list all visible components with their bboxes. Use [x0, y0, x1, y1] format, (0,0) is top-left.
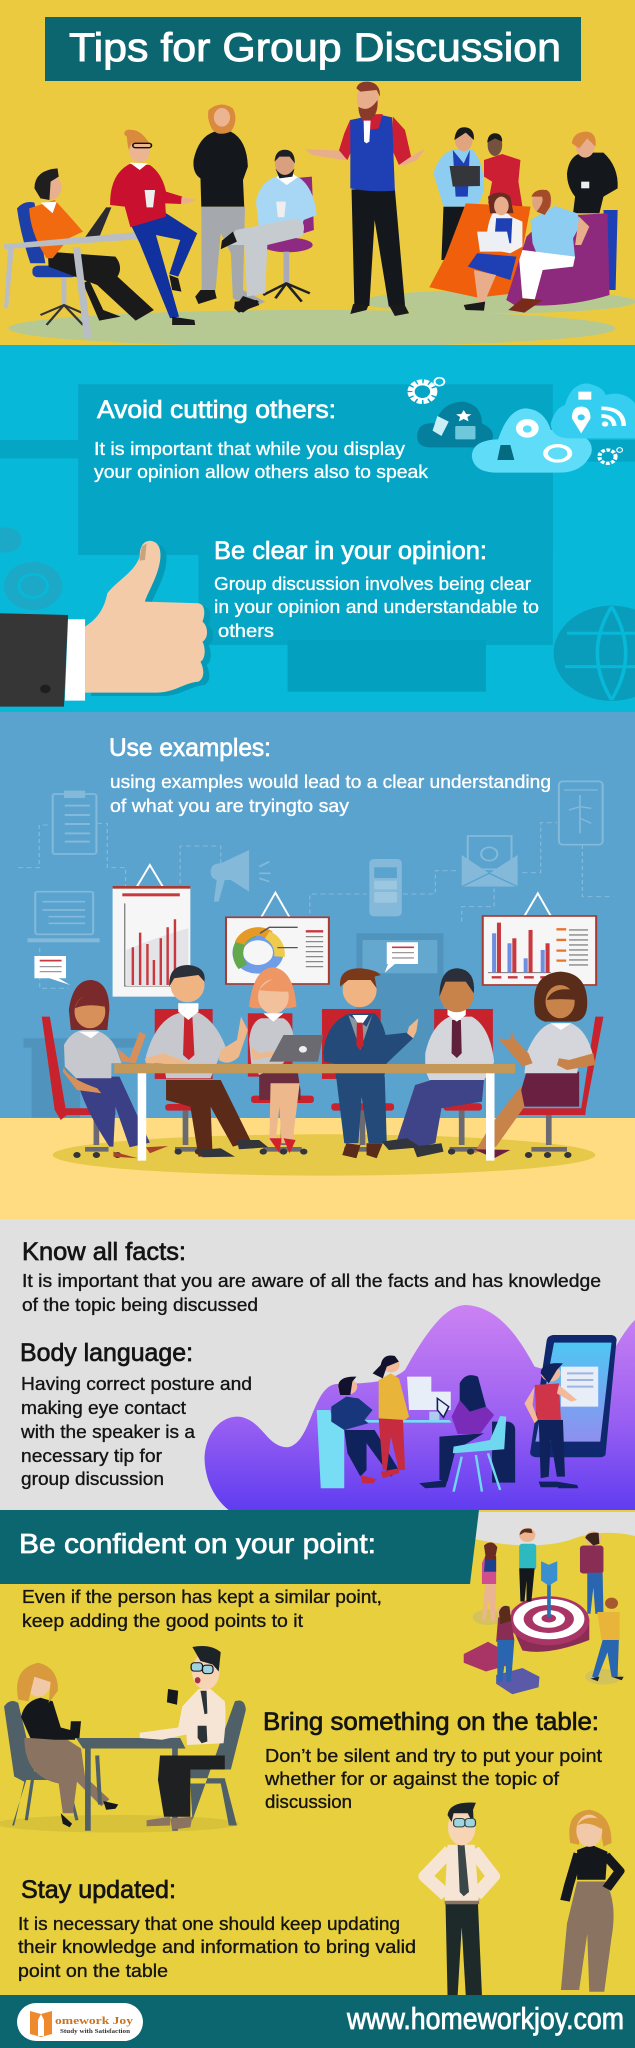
figure: man on purple stool [221, 150, 317, 313]
purple hills [205, 1305, 635, 1512]
icon: gears [410, 378, 622, 463]
tip: body language: Body language: [20, 1339, 193, 1367]
tip: be confident body: keep adding the good points to it [22, 1610, 303, 1631]
icon: dark cloud [417, 402, 493, 447]
figure: woman right [474, 972, 595, 1158]
tip: be clear in your opinion: in your opinion and understandable to [214, 596, 539, 617]
figure: man left [145, 965, 268, 1157]
title banner: Tips for Group Discussion [69, 26, 561, 70]
figure: seated woman [419, 1375, 506, 1492]
icon: top cloud [551, 383, 635, 438]
wall icons [18, 781, 614, 1118]
tip: stay updated: point on the table [18, 1960, 168, 1981]
figure: chairs [42, 1009, 603, 1155]
chart: bar board [113, 865, 190, 997]
illustration: standing man [425, 1803, 493, 1995]
tip: stay updated [18, 1876, 416, 1981]
background shapes and icons [0, 378, 635, 707]
tip: be confident body: Even if the person has kept a similar point, [22, 1586, 382, 1607]
tip: stay updated: Stay updated: [21, 1876, 176, 1904]
logo: omework Joy [55, 2015, 134, 2027]
tip: be clear in your opinion: Group discussion involves being clear [214, 573, 531, 594]
tip: be clear in your opinion: Be clear in your opinion: [214, 537, 487, 565]
illustration: target team [464, 1528, 624, 1694]
tip: know all facts: of the topic being discussed [22, 1294, 258, 1315]
tip: know all facts: Know all facts: [22, 1238, 186, 1266]
illustration: team and phone [205, 1305, 635, 1512]
heading: be confident: Be confident on your point: [19, 1528, 376, 1559]
panel: cyan tips [0, 345, 635, 712]
tip: stay updated: It is necessary that one should keep updating [18, 1913, 400, 1934]
tip: body language: making eye contact [21, 1397, 186, 1418]
panel: grey tips [0, 1219, 635, 1512]
figure: man with phone screen [524, 1363, 578, 1488]
panel: yellow tips [0, 1510, 635, 1996]
tip: avoid cutting others [94, 396, 429, 482]
illustration: meeting room [18, 781, 614, 1176]
tip: body language: necessary tip for [21, 1445, 162, 1466]
tip: stay updated: their knowledge and information to bring valid [18, 1936, 416, 1957]
figure: woman left [63, 980, 168, 1158]
meeting table [114, 1064, 515, 1161]
tip: use examples: using examples would lead to a clear understanding [110, 771, 551, 792]
panel: header [0, 0, 635, 347]
logo [17, 2003, 143, 2041]
illustrations [0, 1528, 624, 1995]
tip: avoid cutting others: It is important that while you display [94, 438, 406, 459]
icon: smartphone [530, 1335, 617, 1457]
icon: desk and monitor [317, 1377, 515, 1488]
figure: seated man [331, 1377, 399, 1483]
icon: thumbs up hand [0, 541, 213, 707]
tip: be confident body [22, 1586, 382, 1631]
tip: avoid cutting others: Avoid cutting others: [97, 396, 336, 424]
icon: light cloud [472, 408, 592, 473]
callout bubbles [34, 942, 418, 985]
footer [0, 1995, 635, 2048]
icon: background gear [0, 527, 62, 610]
tip: avoid cutting others: your opinion allow others also to speak [94, 461, 429, 482]
tip: body language [20, 1339, 252, 1489]
tip: bring something: whether for or against the topic of [264, 1768, 560, 1789]
banner: be confident [0, 1510, 479, 1584]
icon: background globe [555, 607, 635, 700]
figure: presenter in blue vest [305, 82, 425, 316]
panel: use examples [0, 712, 635, 1219]
illustration: team talking [3, 82, 635, 347]
tip: body language: group discussion [21, 1468, 164, 1489]
tip: body language: with the speaker is a [20, 1421, 196, 1442]
tip: use examples: Use examples: [109, 734, 271, 762]
tip: be clear in your opinion [214, 537, 539, 641]
figure: man in black turtleneck [193, 105, 265, 313]
chart: donut board [226, 893, 329, 984]
figure: woman center [249, 967, 323, 1153]
tip: bring something: Don’t be silent and try to put your point [265, 1745, 602, 1766]
tip: use examples [109, 734, 551, 816]
logo: Study with Satisfaction [60, 2029, 131, 2035]
tip: bring something: discussion [265, 1791, 352, 1812]
figure: standing woman [373, 1355, 409, 1470]
chart: grouped bars board [483, 893, 596, 985]
figure: man in suit [323, 968, 418, 1158]
illustration: couple at table [0, 1646, 246, 1832]
figure: woman in red sweater [110, 130, 197, 325]
tip: bring something [263, 1708, 602, 1812]
figure: beanbag group [429, 127, 618, 313]
tip: be clear in your opinion: others [218, 620, 274, 641]
illustration: standing woman [561, 1810, 620, 1992]
figure: man at laptop [3, 168, 154, 338]
tip: know all facts: It is important that you are aware of all the facts and has knowledge [22, 1270, 601, 1291]
tip: know all facts [22, 1238, 601, 1315]
title banner [45, 17, 581, 81]
figure: man right [382, 968, 494, 1157]
tip: body language: Having correct posture and [21, 1373, 252, 1394]
tip: bring something: Bring something on the table: [263, 1708, 599, 1736]
tip: use examples: of what you are tryingto say [110, 795, 350, 816]
